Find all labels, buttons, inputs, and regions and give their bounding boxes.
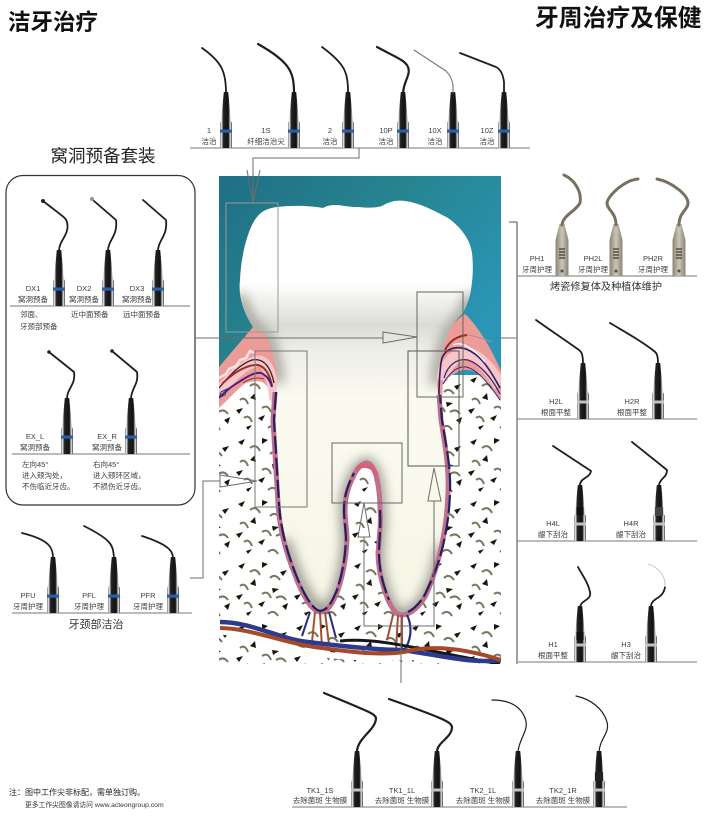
- text: EX usage notes: 进入颊沟处，: [22, 470, 67, 480]
- text: EX usage notes: 进入颊环区域，: [93, 470, 146, 480]
- instrument: TK1_1L: TK1_1L: [389, 786, 415, 795]
- instrument: EX_L: 窝洞预备: [20, 442, 50, 452]
- instrument: 1: 洁治: [202, 136, 217, 146]
- panel: top scaling tips row: [190, 44, 530, 148]
- target box: [417, 292, 463, 397]
- text: DX usage notes: 远中面预备: [123, 309, 161, 319]
- illustration: tooth cross-section: [219, 176, 501, 667]
- instrument: H4R: 龈下刮治: [616, 529, 646, 539]
- panel: subgingival tips: [517, 442, 697, 541]
- text: EX usage notes: 右向45°: [93, 459, 119, 469]
- instrument: DX2: [69, 198, 116, 306]
- instrument: H4L: H4L: [546, 519, 560, 528]
- target box: [226, 203, 278, 332]
- instrument: TK2_1R: TK2_1R: [549, 786, 577, 795]
- leader: apex to bottom tips: [400, 615, 402, 683]
- tooth body: [240, 201, 473, 615]
- callout leader: top tips to crown: [226, 148, 359, 332]
- text: DX usage notes: 牙颈部预备: [20, 321, 58, 331]
- instrument: H4R: [616, 442, 667, 541]
- instrument: H2R: [610, 323, 664, 419]
- caption: ceramic and implant maintenance: 烤瓷修复体及种植体维护: [550, 280, 662, 293]
- gum right layers and vessels: [437, 334, 501, 400]
- instrument: 2: 洁治: [322, 136, 338, 146]
- root canal membrane and vessels: [273, 392, 450, 615]
- instrument: DX1: DX1: [26, 284, 40, 293]
- text: EX usage notes: 左向45°: [22, 459, 48, 469]
- footnote: [9, 787, 164, 809]
- instrument: PFL: 牙周护理: [74, 601, 104, 611]
- arrow: [383, 332, 417, 343]
- instrument: TK1_1S: TK1_1S: [306, 786, 334, 795]
- instrument: EX_R: EX_R: [97, 432, 117, 441]
- apical vessels: [302, 612, 410, 650]
- instrument: H1: [538, 567, 590, 662]
- instrument: PH2L: 牙周护理: [578, 264, 608, 274]
- text: EX usage notes: 不伤临近牙齿。: [22, 481, 74, 491]
- instrument: H4L: [538, 446, 591, 541]
- caption: cervical scaling: 牙颈部洁治: [68, 617, 124, 631]
- instrument: H4R: H4R: [623, 519, 639, 528]
- instrument: 1S: 1S: [261, 126, 271, 135]
- instrument: TK2_1R: 去除菌斑 生物膜: [536, 795, 591, 805]
- target box: [255, 351, 307, 507]
- panel: cervical scaling tips: [12, 526, 192, 631]
- instrument: DX2: 窝洞预备: [69, 294, 99, 304]
- instrument: TK1_1L: [375, 699, 452, 807]
- text: DX usage notes: 近中面预备: [71, 309, 109, 319]
- instrument: PH2L: [578, 179, 638, 276]
- instrument: EX_L: [20, 350, 74, 454]
- instrument: 10P: 洁治: [378, 136, 394, 146]
- instrument: TK2_1L: 去除菌斑 生物膜: [456, 795, 511, 805]
- instrument: 10Z: 洁治: [480, 136, 495, 146]
- callout leader: cervical tips to left root: [190, 351, 307, 578]
- callout leader: to furcation and right root: [332, 351, 459, 626]
- instrument: TK1_1S: 去除菌斑 生物膜: [293, 795, 348, 805]
- title: periodontal treatment and care: 牙周治疗及保健: [535, 5, 702, 32]
- instrument: PH2R: [638, 179, 688, 276]
- instrument: 2: 2: [328, 126, 332, 135]
- instrument: EX_L: EX_L: [26, 432, 44, 441]
- instrument: 10P: [377, 47, 409, 148]
- instrument: PFU: PFU: [20, 591, 36, 600]
- gum left layers and vessels: [219, 351, 275, 400]
- instrument: PFR: 牙周护理: [133, 601, 163, 611]
- heading: cavity preparation kit: 窝洞预备套装: [50, 146, 156, 166]
- instrument: H3: 龈下刮治: [611, 650, 641, 660]
- instrument: 10X: 10X: [428, 126, 442, 135]
- title: scaling treatment: 洁牙治疗: [8, 10, 98, 35]
- instrument: TK2_1L: [456, 700, 526, 807]
- instrument: H1: 根面平整: [538, 650, 568, 660]
- instrument: PFL: [74, 526, 120, 613]
- instrument: PFL: PFL: [82, 591, 96, 600]
- instrument: 10Z: 10Z: [481, 126, 494, 135]
- instrument: 2: [322, 47, 354, 148]
- instrument: H4L: 龈下刮治: [538, 529, 568, 539]
- instrument: 1S: 纤细洁治尖: [247, 136, 285, 146]
- instrument: H3: H3: [621, 640, 631, 649]
- instrument: PFR: PFR: [140, 591, 156, 600]
- bone with specks: [219, 375, 501, 664]
- instrument: DX1: 窝洞预备: [18, 294, 48, 304]
- neurovascular bundle: [220, 622, 501, 667]
- instrument: H3: [611, 564, 665, 662]
- arrow: [220, 475, 257, 487]
- instrument: H1: H1: [548, 640, 558, 649]
- panel: biofilm removal tips: [292, 693, 627, 807]
- instrument: DX1: [18, 199, 68, 306]
- footnote: 注：图中工作尖非标配，需单独订购。: [9, 787, 145, 797]
- instrument: PH1: PH1: [530, 254, 544, 263]
- instrument: PFU: [13, 533, 59, 613]
- instrument: H2R: H2R: [624, 397, 640, 406]
- text: EX usage notes: 不损伤近牙齿。: [93, 481, 146, 491]
- instrument: 10X: 洁治: [428, 136, 443, 146]
- instrument: TK2_1R: [536, 696, 608, 807]
- panel: root planing tips: [517, 320, 697, 419]
- arrow: [247, 170, 260, 203]
- gum right: [437, 314, 501, 402]
- instrument: TK1_1S: [293, 693, 376, 807]
- instrument: 1: 1: [207, 126, 211, 135]
- instrument: DX2: DX2: [77, 284, 91, 293]
- instrument: 1S: [247, 44, 300, 148]
- instrument: H2L: H2L: [549, 397, 563, 406]
- gum left: [219, 327, 278, 408]
- instrument: PH1: 牙周护理: [522, 264, 552, 274]
- instrument: DX3: DX3: [130, 284, 144, 293]
- instrument: TK2_1L: TK2_1L: [470, 786, 496, 795]
- instrument: 10X: [414, 50, 459, 148]
- instrument: TK1_1L: 去除菌斑 生物膜: [375, 795, 430, 805]
- panel: cavity preparation kit: [6, 176, 195, 505]
- instrument: H2L: [536, 320, 589, 419]
- teal background: [219, 176, 501, 376]
- text: DX usage notes: [20, 309, 161, 331]
- instrument: 10Z: [460, 53, 510, 148]
- instrument: PFU: 牙周护理: [13, 601, 43, 611]
- text: EX usage notes: [22, 459, 146, 491]
- instrument: PH1: [522, 175, 580, 276]
- instrument: H2R: 根面平整: [617, 407, 647, 417]
- instrument: EX_R: 窝洞预备: [92, 442, 122, 452]
- instrument: 10P: 10P: [379, 126, 393, 135]
- instrument: PH2R: 牙周护理: [638, 264, 668, 274]
- instrument: PFR: [133, 536, 179, 613]
- text: DX usage notes: 邻面、: [20, 309, 42, 319]
- instrument: 1: [202, 48, 232, 148]
- instrument: H2L: 根面平整: [541, 407, 571, 417]
- instrument: EX_R: [92, 349, 137, 454]
- panel: root planing and subgingival tips: [518, 564, 697, 662]
- callout leader: centre line to right neck: [195, 292, 516, 397]
- instrument: DX3: [122, 200, 166, 306]
- instrument: PH2R: PH2R: [643, 254, 664, 263]
- instrument: DX3: 窝洞预备: [122, 294, 152, 304]
- footnote: 更多工作尖图像请访问 www.acteongroup.com: [25, 800, 164, 809]
- panel: ceramic and implant maintenance tips: [517, 175, 697, 293]
- bracket: right column: [509, 222, 517, 664]
- instrument: PH2L: PH2L: [584, 254, 602, 263]
